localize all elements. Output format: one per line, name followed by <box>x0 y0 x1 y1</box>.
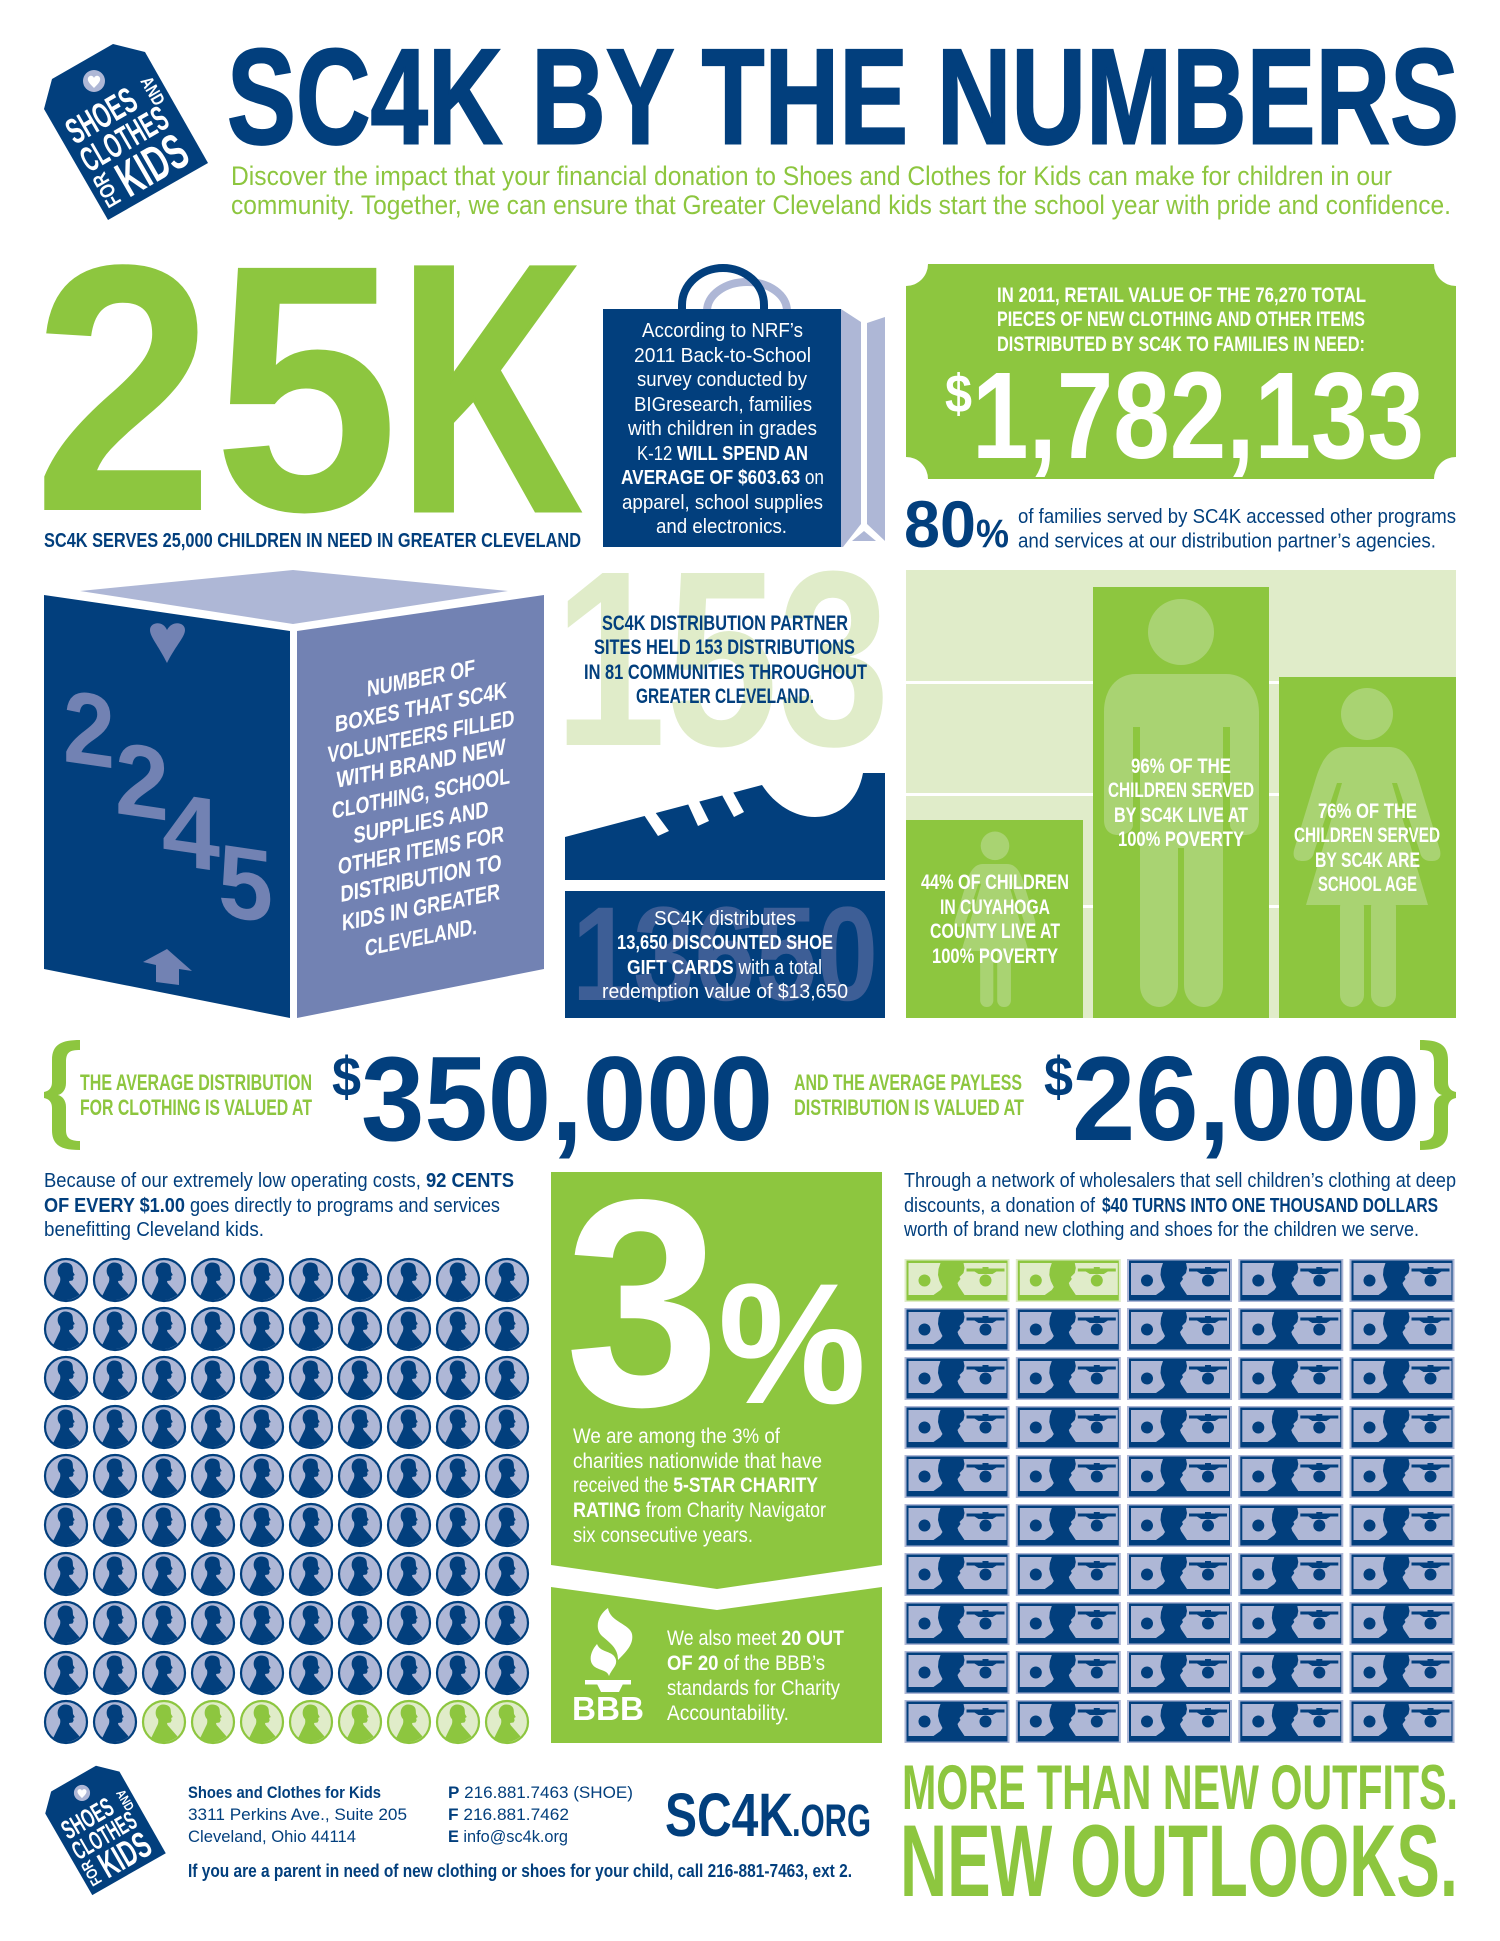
box graphic: 2245 boxes: NUMBER OF <box>367 654 475 702</box>
stat: 26,000: $ <box>1044 1045 1073 1108</box>
stat: 80 percent: of families served by SC4K accessed other programs <box>1018 506 1456 528</box>
logo: price tag: CLOTHES <box>74 99 175 180</box>
brace: right <box>1420 1040 1456 1150</box>
box graphic: 2245 boxes: VOLUNTEERS FILLED <box>328 705 514 768</box>
label: average distribution payless: AND THE AVERAGE PAYLESS <box>794 1070 1022 1095</box>
shopping bag panel: According to NRF’s <box>642 320 803 342</box>
stat: 25K: 2 <box>33 191 214 585</box>
label: average distribution payless <box>794 1070 1024 1120</box>
stat: 153 distributions: SITES HELD 153 DISTRIBUTIONS <box>594 636 855 659</box>
logo: footer price tag: SHOES <box>56 1792 119 1845</box>
panel: 3 percent: charities nationwide that have <box>573 1450 822 1473</box>
text: 92 cents <box>44 1170 514 1241</box>
stat: 153 distributions: 153 <box>554 519 890 798</box>
logo: price tag <box>44 44 208 220</box>
panel: 3 percent: six consecutive years. <box>573 1524 753 1547</box>
box graphic: 2245 boxes: 2 <box>63 667 115 790</box>
panel: BBB: standards for Charity <box>667 1677 840 1700</box>
logo: price tag: KIDS <box>106 123 198 208</box>
bar: 96 percent: BY SC4K LIVE AT <box>1114 804 1248 827</box>
bar: 96 percent <box>1093 587 1269 1018</box>
box graphic: 2245 boxes: DISTRIBUTION TO <box>340 849 502 907</box>
box graphic: 2245 boxes: 5 <box>218 821 273 945</box>
box graphic: 2245 boxes: KIDS IN GREATER <box>342 878 500 936</box>
bar: 76 percent <box>1279 677 1456 1018</box>
bar: 76 percent: CHILDREN SERVED <box>1294 824 1440 847</box>
panel: 3 percent: % <box>718 1248 866 1440</box>
ticket panel: retail value: DISTRIBUTED BY SC4K TO FAMILIES IN NEED: <box>997 333 1365 356</box>
footer: address: 3311 Perkins Ave., Suite 205 <box>188 1805 407 1824</box>
panel: gift cards: SC4K distributes <box>654 908 796 930</box>
stat: 26,000: 26,000 <box>1072 1032 1420 1166</box>
panel: gift cards: GIFT CARDS with a total <box>627 957 822 979</box>
bar: 44 percent: 44% OF CHILDREN <box>921 871 1069 894</box>
panel: 3 percent <box>551 1138 882 1589</box>
icon: shoe <box>565 773 885 880</box>
logo: footer price tag: CLOTHES <box>67 1807 142 1866</box>
text: 92 cents: Because of our extremely low operating costs, 92 CENTS <box>44 1170 514 1192</box>
box graphic: 2245 boxes: 4 <box>162 769 220 893</box>
panel: 3 percent: received the 5-STAR CHARITY <box>573 1474 818 1497</box>
panel: gift cards: redemption value of $13,650 <box>602 981 848 1003</box>
footer: parent call-out: If you are a parent in need of new clothing or shoes for your child, call 216-881-7463, ext 2. <box>188 1861 852 1881</box>
bar: 44 percent: 100% POVERTY <box>932 945 1058 968</box>
footer: contact <box>448 1783 633 1846</box>
text: $40 turns into one thousand: discounts, a donation of <box>904 1195 1095 1217</box>
intro text: Discover the impact that your financial donation to Shoes and Clothes for Kids can make for children in our <box>231 161 1392 191</box>
shopping bag panel: with children in grades <box>627 418 817 440</box>
logo: price tag: AND <box>137 73 169 109</box>
ticket panel: retail value: PIECES OF NEW CLOTHING AND OTHER ITEMS <box>997 308 1365 331</box>
shopping bag panel: BIGresearch, families <box>634 394 812 416</box>
box graphic: 2245 boxes: CLEVELAND. <box>365 913 477 961</box>
shopping bag panel: and electronics. <box>656 516 787 538</box>
shopping bag panel: apparel, school supplies <box>622 492 823 514</box>
bar: 96 percent: 100% POVERTY <box>1118 828 1244 851</box>
shopping bag panel: 2011 Back-to-School <box>634 345 811 367</box>
caption: 25,000 children: SC4K SERVES 25,000 CHILDREN IN NEED IN GREATER CLEVELAND <box>44 530 581 552</box>
box graphic: 2245 boxes: CLOTHING, SCHOOL <box>332 762 510 824</box>
bar: 96 percent: CHILDREN SERVED <box>1108 779 1254 802</box>
chart: 100 coins, 92 highlighted <box>45 1259 528 1743</box>
footer: contact: E info@sc4k.org <box>448 1827 568 1846</box>
panel: gift cards: 13,650 DISCOUNTED SHOE <box>617 932 833 954</box>
bar: 96 percent: 96% OF THE <box>1131 755 1231 778</box>
text: 92 cents: benefitting Cleveland kids. <box>44 1219 264 1241</box>
panel: BBB: Accountability. <box>667 1702 789 1725</box>
ticket panel: retail value: $ <box>945 364 972 424</box>
chart: children statistics <box>906 570 1456 1018</box>
label: average distribution clothing <box>80 1070 312 1120</box>
stat: 350,000: 350,000 <box>361 1032 773 1166</box>
logo: footer price tag: KIDS <box>91 1824 158 1886</box>
panel: BBB: OF 20 of the BBB’s <box>667 1652 825 1675</box>
stat: 153 distributions: GREATER CLEVELAND. <box>636 685 814 708</box>
intro text <box>231 161 1451 220</box>
box graphic: 2245 boxes: OTHER ITEMS FOR <box>338 821 504 880</box>
ticket panel: retail value <box>906 264 1456 485</box>
shopping bag panel <box>603 268 885 547</box>
panel: BBB: We also meet 20 OUT <box>667 1627 844 1650</box>
text: 92 cents: OF EVERY $1.00 goes directly to programs and services <box>44 1195 500 1217</box>
bar: 76 percent: 76% OF THE <box>1318 800 1417 823</box>
bar: 76 percent: SCHOOL AGE <box>1318 873 1417 896</box>
stat: 80 percent: 80 <box>904 487 976 561</box>
panel: 3 percent: We are among the 3% of <box>573 1425 780 1448</box>
panel: 3 percent: RATING from Charity Navigator <box>573 1499 826 1522</box>
panel: BBB <box>551 1587 882 1743</box>
logo: price tag: SHOES <box>58 79 144 152</box>
footer: contact: P 216.881.7463 (SHOE) <box>448 1783 633 1802</box>
box graphic: 2245 boxes: 2 <box>115 719 169 843</box>
shopping bag panel: survey conducted by <box>637 369 807 391</box>
stat: 153 distributions: IN 81 COMMUNITIES THROUGHOUT <box>584 661 867 684</box>
logo: footer price tag: FOR <box>78 1857 106 1888</box>
stat: 25K <box>33 191 581 585</box>
logo: footer price tag: AND <box>113 1787 137 1814</box>
box graphic: 2245 boxes: SUPPLIES AND <box>354 796 488 848</box>
stat: 25K: K <box>399 191 581 585</box>
tagline <box>900 1753 1458 1918</box>
footer: website: .ORG <box>792 1795 871 1846</box>
box graphic: 2245 boxes: BOXES THAT SC4K <box>335 677 507 737</box>
footer: contact: F 216.881.7462 <box>448 1805 569 1824</box>
bar: 44 percent <box>906 820 1083 1018</box>
panel: 3 percent: 3 <box>565 1138 720 1468</box>
bar: 44 percent: IN CUYAHOGA <box>940 896 1050 919</box>
bar: 76 percent: BY SC4K ARE <box>1315 849 1420 872</box>
ticket panel: retail value: IN 2011, RETAIL VALUE OF THE 76,270 TOTAL <box>997 284 1366 307</box>
logo: price tag: FOR <box>88 168 126 211</box>
box graphic: 2245 boxes <box>44 570 544 1018</box>
shopping bag panel: AVERAGE OF $603.63 on <box>621 467 824 489</box>
text: $40 turns into one thousand: Through a network of wholesalers that sell children’s clothing at deep <box>904 1170 1456 1192</box>
brace: left <box>44 1040 80 1150</box>
text: $40 turns into one thousand: worth of brand new clothing and shoes for the children we serve. <box>903 1219 1419 1241</box>
shopping bag panel: K-12 WILL SPEND AN <box>637 443 808 465</box>
logo: footer price tag <box>45 1766 166 1895</box>
bar: 44 percent: COUNTY LIVE AT <box>930 920 1060 943</box>
stat: 153 distributions: SC4K DISTRIBUTION PARTNER <box>602 612 848 635</box>
stat: 80 percent <box>904 487 1456 561</box>
icon: BBB torch: BBB <box>572 1690 644 1727</box>
footer: website: SC4K <box>665 1781 793 1849</box>
stat: 350,000: $ <box>332 1045 361 1108</box>
text: $40 turns into one thousand <box>903 1170 1456 1241</box>
footer: address: Cleveland, Ohio 44114 <box>188 1827 356 1846</box>
stat: 80 percent: and services at our distribution partner’s agencies. <box>1018 530 1436 552</box>
icon: BBB torch <box>572 1608 644 1727</box>
label: average distribution clothing: THE AVERAGE DISTRIBUTION <box>80 1070 312 1095</box>
stat: 25K: 5 <box>213 191 399 585</box>
label: average distribution clothing: FOR CLOTHING IS VALUED AT <box>80 1095 312 1120</box>
footer: address: Shoes and Clothes for Kids <box>188 1783 381 1802</box>
footer: address <box>188 1783 407 1846</box>
panel: gift cards: 13650 <box>572 880 878 1029</box>
chart: 50 dollar bills, 2 highlighted <box>904 1259 1454 1743</box>
stat: 80 percent: % <box>976 512 1009 556</box>
label: average distribution payless: DISTRIBUTION IS VALUED AT <box>794 1095 1024 1120</box>
box graphic: 2245 boxes: WITH BRAND NEW <box>336 733 506 793</box>
